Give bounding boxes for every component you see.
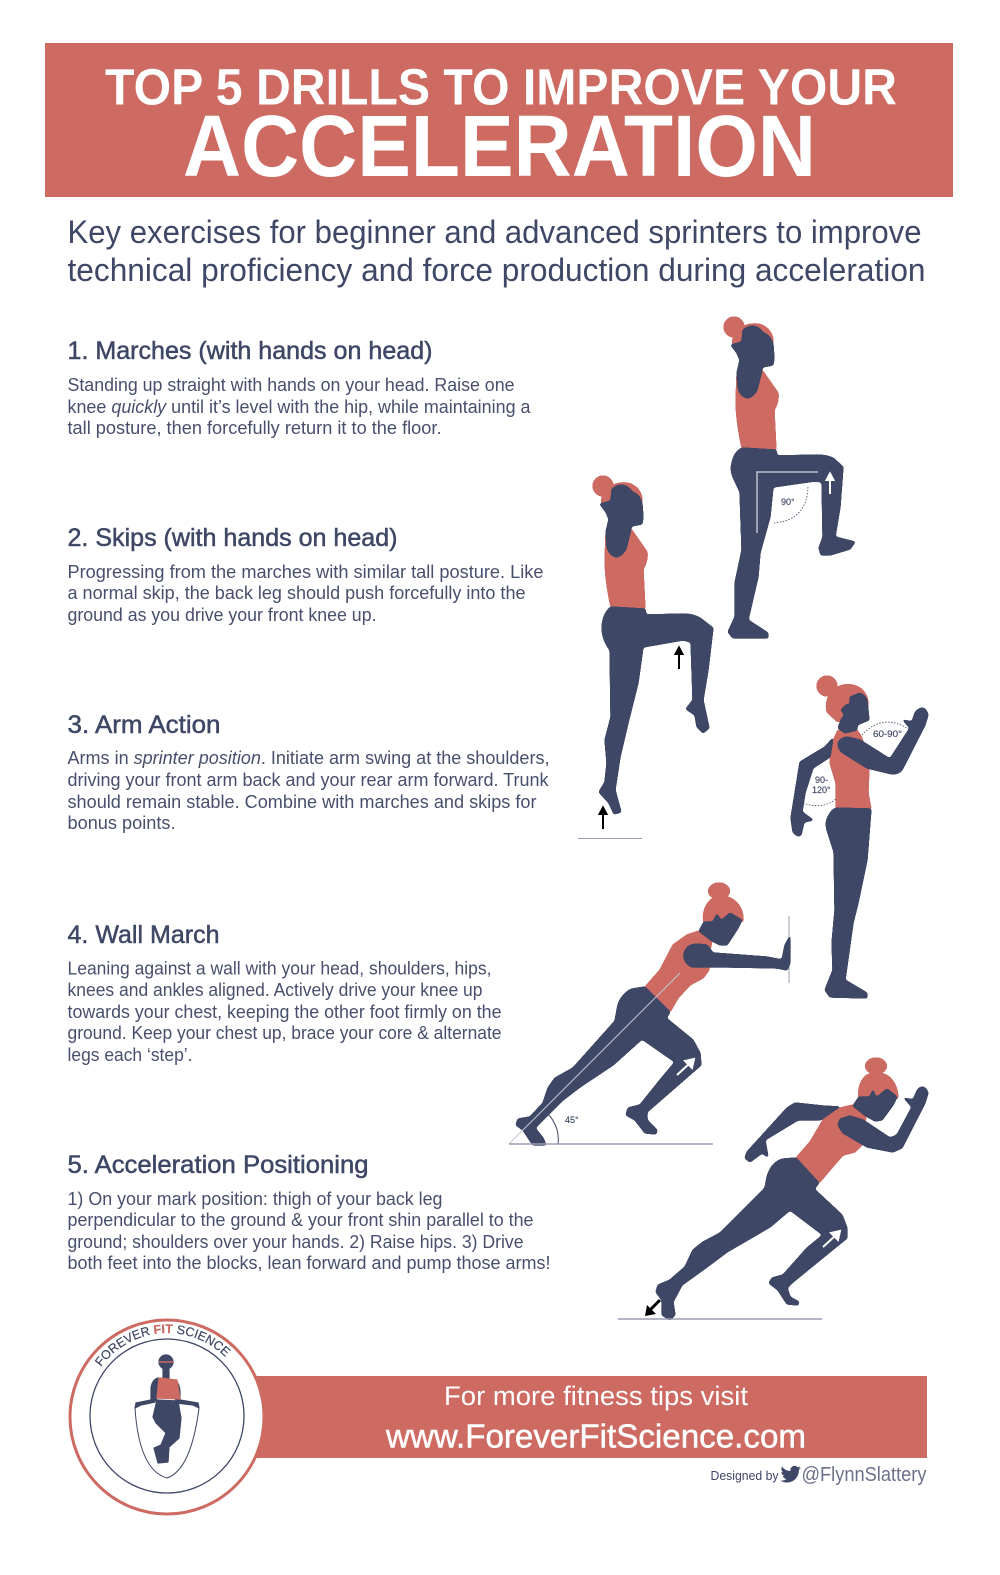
- section 2 text: a normal skip, the back leg should push forcefully into the: [68, 582, 526, 603]
- section 1 text: tall posture, then forcefully return it to the floor.: [68, 417, 442, 438]
- section 3 text: [68, 711, 550, 833]
- section 3 text: Arms in sprinter position. Initiate arm swing at the shoulders,: [68, 747, 550, 768]
- arrow: push into ground: [649, 1300, 660, 1311]
- section 4 text: 4. Wall March: [68, 921, 220, 949]
- section 5 text: 5. Acceleration Positioning: [68, 1151, 368, 1179]
- figure 3: arm action: 60-90°: [873, 729, 902, 739]
- ground line: [578, 838, 642, 840]
- figure 2: skip: [578, 476, 713, 838]
- logo wordmark: FOREVER FIT SCIENCE: [94, 1324, 231, 1366]
- ground line: [509, 1143, 713, 1145]
- section 5 text: [68, 1151, 550, 1273]
- footer url: www.ForeverFitScience.com: [385, 1418, 806, 1454]
- figure 3: arm action: [791, 676, 928, 998]
- section 4 text: legs each ‘step’.: [68, 1044, 192, 1065]
- arrow: knee up: [826, 474, 834, 494]
- section 2 text: Progressing from the marches with similar tall posture. Like: [68, 561, 544, 582]
- 45 degree guide line: [509, 973, 680, 1144]
- section 1 text: Standing up straight with hands on your head. Raise one: [68, 374, 514, 395]
- angle arcs: [862, 722, 910, 735]
- section 3 text: 3. Arm Action: [68, 711, 220, 739]
- section 4 text: knees and ankles aligned. Actively drive your knee up: [68, 979, 482, 1000]
- figure 4: wall march: 45°: [565, 1115, 579, 1125]
- figure 3: arm action: 120°: [812, 785, 831, 795]
- ground line: [618, 1318, 822, 1320]
- section 4 text: [68, 921, 502, 1065]
- section 3 text: should remain stable. Combine with marches and skips for: [68, 791, 536, 812]
- section 5 text: both feet into the blocks, lean forward and pump those arms!: [68, 1252, 550, 1273]
- section 2 text: 2. Skips (with hands on head): [68, 524, 398, 552]
- header banner: [45, 43, 953, 197]
- footer call to action: For more fitness tips visit: [444, 1381, 748, 1411]
- title line 2: ACCELERATION: [183, 98, 816, 195]
- arrow: knee up: [676, 648, 682, 669]
- section 5 text: 1) On your mark position: thigh of your back leg: [68, 1188, 442, 1209]
- section 3 text: driving your front arm back and your rear arm forward. Trunk: [68, 769, 549, 790]
- section 5 text: perpendicular to the ground & your front shin parallel to the: [68, 1209, 534, 1230]
- title line 1: TOP 5 DRILLS TO IMPROVE YOUR: [105, 58, 897, 116]
- section 2 text: [68, 524, 544, 625]
- footer banner: [240, 1376, 927, 1458]
- section 2 text: ground as you drive your front knee up.: [68, 604, 376, 625]
- subtitle: technical proficiency and force production during acceleration: [68, 252, 926, 288]
- logo skipping figure: [135, 1355, 199, 1478]
- icon: twitter bird: [780, 1466, 801, 1482]
- subtitle: Key exercises for beginner and advanced sprinters to improve: [68, 214, 922, 250]
- wall line: [788, 916, 790, 983]
- subtitle: [68, 214, 926, 288]
- designer credit: @FlynnSlattery: [802, 1464, 926, 1486]
- figure 1: march: [724, 317, 855, 638]
- figure 3: arm action: 90-: [815, 775, 828, 785]
- designer credit: Designed by: [710, 1469, 779, 1483]
- arrow: knee drive: [677, 1059, 694, 1075]
- section 1 text: [68, 337, 531, 438]
- section 3 text: bonus points.: [68, 812, 176, 833]
- section 5 text: ground; shoulders over your hands. 2) Raise hips. 3) Drive: [68, 1231, 524, 1252]
- arrow: knee drive: [823, 1231, 840, 1247]
- designer credit: [710, 1464, 926, 1486]
- figure 4: wall march: [509, 883, 790, 1145]
- arrow: push-off up: [600, 808, 606, 829]
- figure 1: march: 90°: [781, 497, 795, 507]
- section 1 text: knee quickly until it’s level with the hip, while maintaining a: [68, 396, 531, 417]
- figure 5: acceleration: [618, 1058, 928, 1320]
- section 4 text: Leaning against a wall with your head, shoulders, hips,: [68, 958, 492, 978]
- angle guide: [757, 472, 818, 533]
- section 4 text: ground. Keep your chest up, brace your core & alternate: [68, 1022, 502, 1043]
- logo badge: [68, 1318, 262, 1516]
- section 1 text: 1. Marches (with hands on head): [68, 337, 432, 365]
- section 4 text: towards your chest, keeping the other foot firmly on the: [68, 1001, 502, 1022]
